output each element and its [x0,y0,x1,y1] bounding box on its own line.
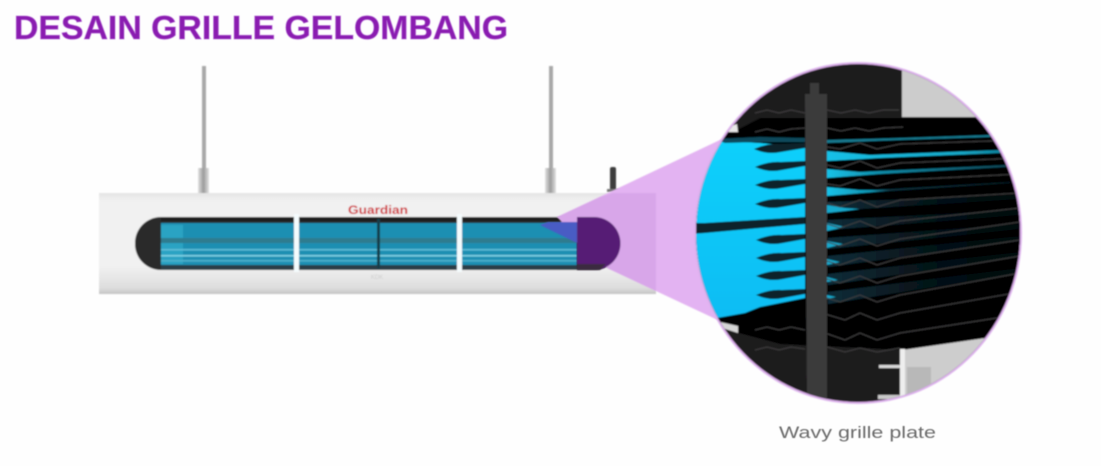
left hanging rod [198,66,209,193]
cyan plate strips right of post [827,135,1010,299]
mounting bracket [878,349,931,405]
title: DESAIN GRILLE GELOMBANG [14,9,508,46]
model mark: KDK [371,275,383,281]
magnifier cone [540,139,722,322]
vertical support post [805,83,827,402]
divider: right [457,214,462,272]
caption: Wavy grille plate [779,423,936,442]
highlighted grille section [577,217,620,270]
grey wall top [900,70,976,118]
bracket bottom left [720,322,738,333]
power connector [607,167,619,192]
grey wall bottom [904,336,985,396]
dark teal plate bands [828,195,1020,304]
black plates band [690,118,1025,350]
right hanging rod [545,66,556,193]
air curtain unit [99,66,656,294]
upper teal edge [715,137,805,143]
magnified grille detail [690,58,1027,410]
dark fingers [754,143,805,299]
grille window [135,217,620,270]
lens border [694,62,1022,404]
dark centre gap [690,217,805,234]
wavy plate edges [755,110,1020,352]
brand label: Guardian [348,203,408,217]
housing [99,193,656,294]
divider: left [294,214,299,272]
bracket top left [725,124,738,132]
cyan zone [690,141,805,320]
